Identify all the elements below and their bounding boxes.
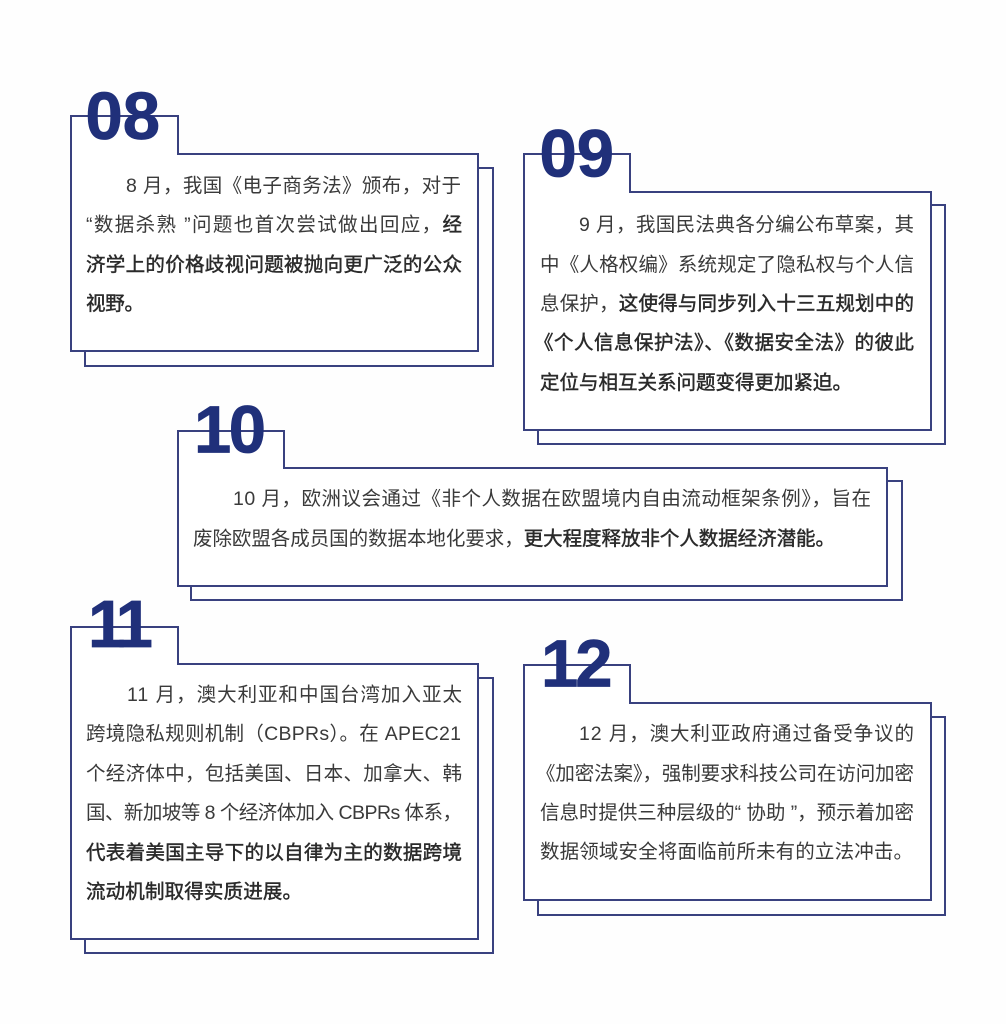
panel 09 text: 9 月，我国民法典各分编公布草案，其 bbox=[579, 214, 914, 236]
panel 09 text: 定位与相互关系问题变得更加紧迫。 bbox=[540, 372, 852, 394]
number 08: 08 bbox=[86, 79, 160, 154]
panel 11 shadow outline bbox=[85, 678, 493, 953]
panel 11 text: 流动机制取得实质进展。 bbox=[86, 881, 302, 903]
number 12: 12 bbox=[541, 626, 610, 702]
panel 12 tabbed frame bbox=[524, 665, 931, 900]
number 10: 10 bbox=[194, 392, 264, 468]
number 11: 11 bbox=[88, 587, 152, 662]
panel 08 text: 8 月，我国《电子商务法》颁布，对于 bbox=[126, 175, 461, 197]
panel 10 tabbed frame bbox=[178, 431, 887, 586]
panel 09 tabbed frame bbox=[524, 154, 931, 430]
panel: 12 December bbox=[524, 626, 945, 915]
panel 08 text: 济学上的价格歧视问题被抛向更广泛的公众 bbox=[86, 254, 462, 276]
panel 10 text: 废除欧盟各成员国的数据本地化要求，更大程度释放非个人数据经济潜能。 bbox=[193, 528, 835, 550]
panel 12 text: 12 月，澳大利亚政府通过备受争议的 bbox=[579, 723, 914, 745]
panel 11 text: 11 月，澳大利亚和中国台湾加入亚太 bbox=[127, 684, 462, 706]
panel 12 text: 《加密法案》，强制要求科技公司在访问加密 bbox=[536, 763, 914, 785]
panel 09 text bbox=[534, 214, 914, 394]
panel 08 shadow outline bbox=[85, 168, 493, 366]
panel: 08 August bbox=[71, 79, 493, 366]
panel 09 text: 《个人信息保护法》、《数据安全法》的彼此 bbox=[534, 332, 914, 354]
panel: 10 October bbox=[178, 392, 902, 600]
panel 09 shadow outline bbox=[538, 205, 945, 444]
panel 08 text: 视野。 bbox=[86, 293, 144, 315]
panel: 09 September bbox=[524, 116, 945, 444]
panel 11 tabbed frame bbox=[71, 627, 478, 939]
panel 11 text: 个经济体中，包括美国、日本、加拿大、韩 bbox=[86, 762, 462, 785]
panel 10 shadow outline bbox=[191, 481, 902, 600]
panel 11 text: 国、新加坡等 8 个经济体加入 CBPRs 体系， bbox=[86, 802, 462, 824]
number 09: 09 bbox=[540, 116, 614, 192]
panel 12 text: 信息时提供三种层级的“ 协助 ”，预示着加密 bbox=[540, 802, 914, 824]
panel 11 text bbox=[86, 684, 462, 903]
panel 10 text: 10 月，欧洲议会通过《非个人数据在欧盟境内自由流动框架条例》，旨在 bbox=[233, 488, 871, 510]
panel 09 text: 息保护，这使得与同步列入十三五规划中的 bbox=[540, 293, 914, 315]
panel 12 shadow outline bbox=[538, 717, 945, 915]
panel 12 text bbox=[536, 723, 914, 863]
panel 11 text: 代表着美国主导下的以自律为主的数据跨境 bbox=[86, 842, 462, 864]
panel 08 text bbox=[86, 175, 462, 315]
panel 11 text: 跨境隐私规则机制（CBPRs）。在 APEC21 bbox=[86, 723, 461, 745]
panel 08 tabbed frame bbox=[71, 116, 478, 351]
panel 12 text: 数据领域安全将面临前所未有的立法冲击。 bbox=[540, 841, 913, 863]
panel 08 text: “数据杀熟 ”问题也首次尝试做出回应，经 bbox=[86, 214, 462, 236]
panel 10 text bbox=[193, 488, 871, 550]
panel: 11 November bbox=[71, 587, 493, 953]
panel 09 text: 中《人格权编》系统规定了隐私权与个人信 bbox=[540, 254, 914, 276]
